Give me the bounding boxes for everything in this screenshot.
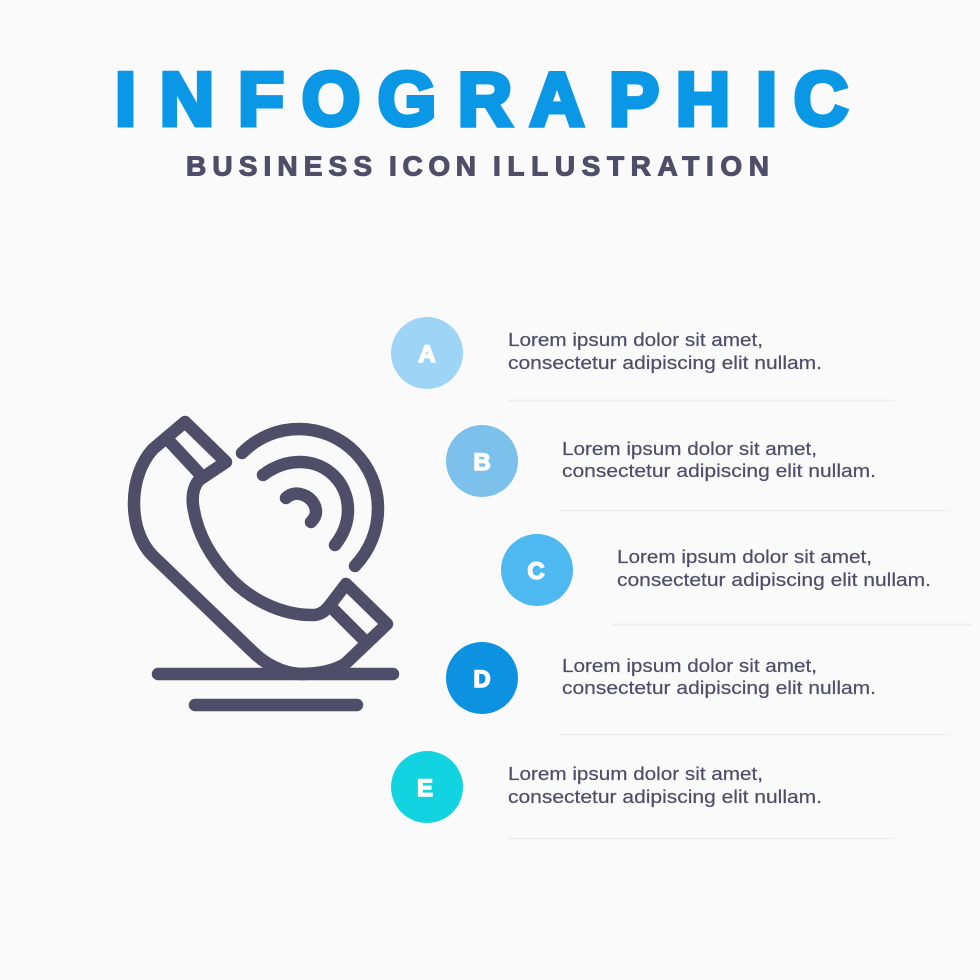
mouthpiece divider bbox=[333, 609, 362, 638]
badge C: C bbox=[527, 558, 545, 585]
text A: consectetur adipiscing elit nullam. bbox=[508, 353, 822, 373]
badge A: A bbox=[418, 341, 436, 368]
badge D: D bbox=[473, 666, 491, 693]
outer signal arc bbox=[242, 429, 378, 566]
item C bbox=[501, 534, 972, 624]
text D: Lorem ipsum dolor sit amet, bbox=[562, 656, 817, 676]
text C bbox=[617, 547, 931, 590]
text B: consectetur adipiscing elit nullam. bbox=[562, 461, 876, 481]
text A bbox=[508, 330, 822, 373]
subtitle: BUSINESS bbox=[186, 150, 372, 182]
text B: Lorem ipsum dolor sit amet, bbox=[562, 439, 817, 459]
badge B bbox=[446, 425, 518, 497]
text E: Lorem ipsum dolor sit amet, bbox=[508, 764, 763, 784]
item A bbox=[391, 317, 895, 400]
text D: consectetur adipiscing elit nullam. bbox=[562, 678, 876, 698]
middle signal arc bbox=[263, 462, 348, 545]
item B bbox=[446, 425, 950, 510]
text C: consectetur adipiscing elit nullam. bbox=[617, 570, 931, 590]
title: INFOGRAPHIC bbox=[115, 57, 848, 141]
text D bbox=[562, 656, 876, 698]
text A: Lorem ipsum dolor sit amet, bbox=[508, 330, 763, 350]
base line lower bbox=[195, 699, 357, 711]
text E: consectetur adipiscing elit nullam. bbox=[508, 787, 822, 807]
badge B: B bbox=[473, 449, 491, 476]
badge E: E bbox=[417, 775, 433, 802]
subtitle: ILLUSTRATION bbox=[493, 150, 769, 182]
subtitle: ICON bbox=[389, 150, 476, 182]
handset outline bbox=[134, 422, 387, 674]
badge E bbox=[391, 751, 463, 823]
text B bbox=[562, 439, 876, 481]
badge A bbox=[391, 317, 463, 389]
inner signal arc bbox=[286, 494, 316, 522]
text E bbox=[508, 764, 822, 807]
text C: Lorem ipsum dolor sit amet, bbox=[617, 547, 872, 567]
item E bbox=[391, 751, 895, 838]
base line upper bbox=[158, 668, 393, 680]
item D bbox=[446, 642, 950, 734]
badge D bbox=[446, 642, 518, 714]
subtitle bbox=[186, 150, 769, 182]
earpiece divider bbox=[170, 442, 198, 472]
icon: telephone handset with signal arcs bbox=[134, 422, 393, 705]
badge C bbox=[501, 534, 573, 606]
